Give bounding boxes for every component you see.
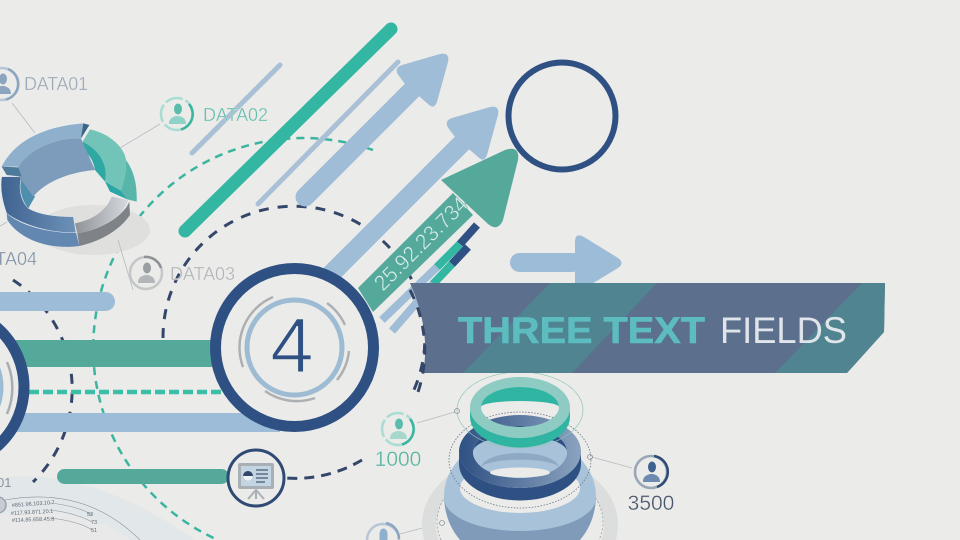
top-right circle	[508, 62, 616, 170]
striped small lines	[382, 225, 477, 331]
presentation icon	[228, 450, 284, 506]
teal dashed orbit	[93, 138, 373, 540]
label DATA02: DATA02	[203, 105, 268, 125]
green arrow with value	[358, 149, 518, 312]
ring stack	[422, 372, 618, 540]
value 3500: 3500	[628, 492, 674, 515]
value 1000: 1000	[375, 448, 421, 471]
navy dashed orbit, main	[163, 206, 425, 392]
icon: 1000 user	[382, 413, 414, 445]
icon: DATA03 user	[130, 257, 162, 289]
number circle 4: 4	[270, 301, 314, 389]
top blue arrow	[305, 54, 448, 197]
number circle 4	[216, 268, 374, 426]
title banner: THREE TEXT	[458, 310, 705, 351]
horizontal bars	[0, 292, 280, 484]
icon: DATA01 user	[0, 68, 18, 100]
bottom-left data disc	[0, 475, 195, 540]
second blue arrow	[322, 107, 498, 283]
bottom-left data disc: #851.96.103.10.7	[12, 500, 55, 509]
label DATA03: DATA03	[170, 264, 235, 284]
navy dashed orbit, lower	[285, 460, 362, 478]
bottom-left data disc: #114.85.658.45.8	[12, 517, 54, 524]
title banner: FIELDS	[720, 310, 847, 351]
bottom-left data disc: 73	[91, 520, 97, 526]
icon: 3500 user	[635, 456, 668, 488]
teal diagonal bar	[185, 29, 391, 231]
thin diagonal lines	[192, 62, 398, 204]
label DATA01: DATA01	[24, 74, 88, 94]
icon: DATA02 user	[161, 98, 193, 130]
dashes over banner edge	[410, 290, 425, 392]
bottom-left data disc: #117.93.871.20.1	[11, 509, 53, 517]
navy dashed orbit, left	[13, 280, 72, 482]
bottom-left data disc: 51	[91, 528, 97, 534]
icon: bottom user	[367, 523, 399, 540]
right blue arrow	[510, 235, 622, 288]
left number circle	[0, 308, 24, 466]
connector lines	[0, 103, 632, 534]
bottom-left data disc: 53	[87, 512, 93, 518]
green arrow with value: 25.92.23.734	[369, 192, 473, 296]
title banner	[410, 283, 885, 373]
segmented 3D ring chart	[1, 123, 150, 255]
